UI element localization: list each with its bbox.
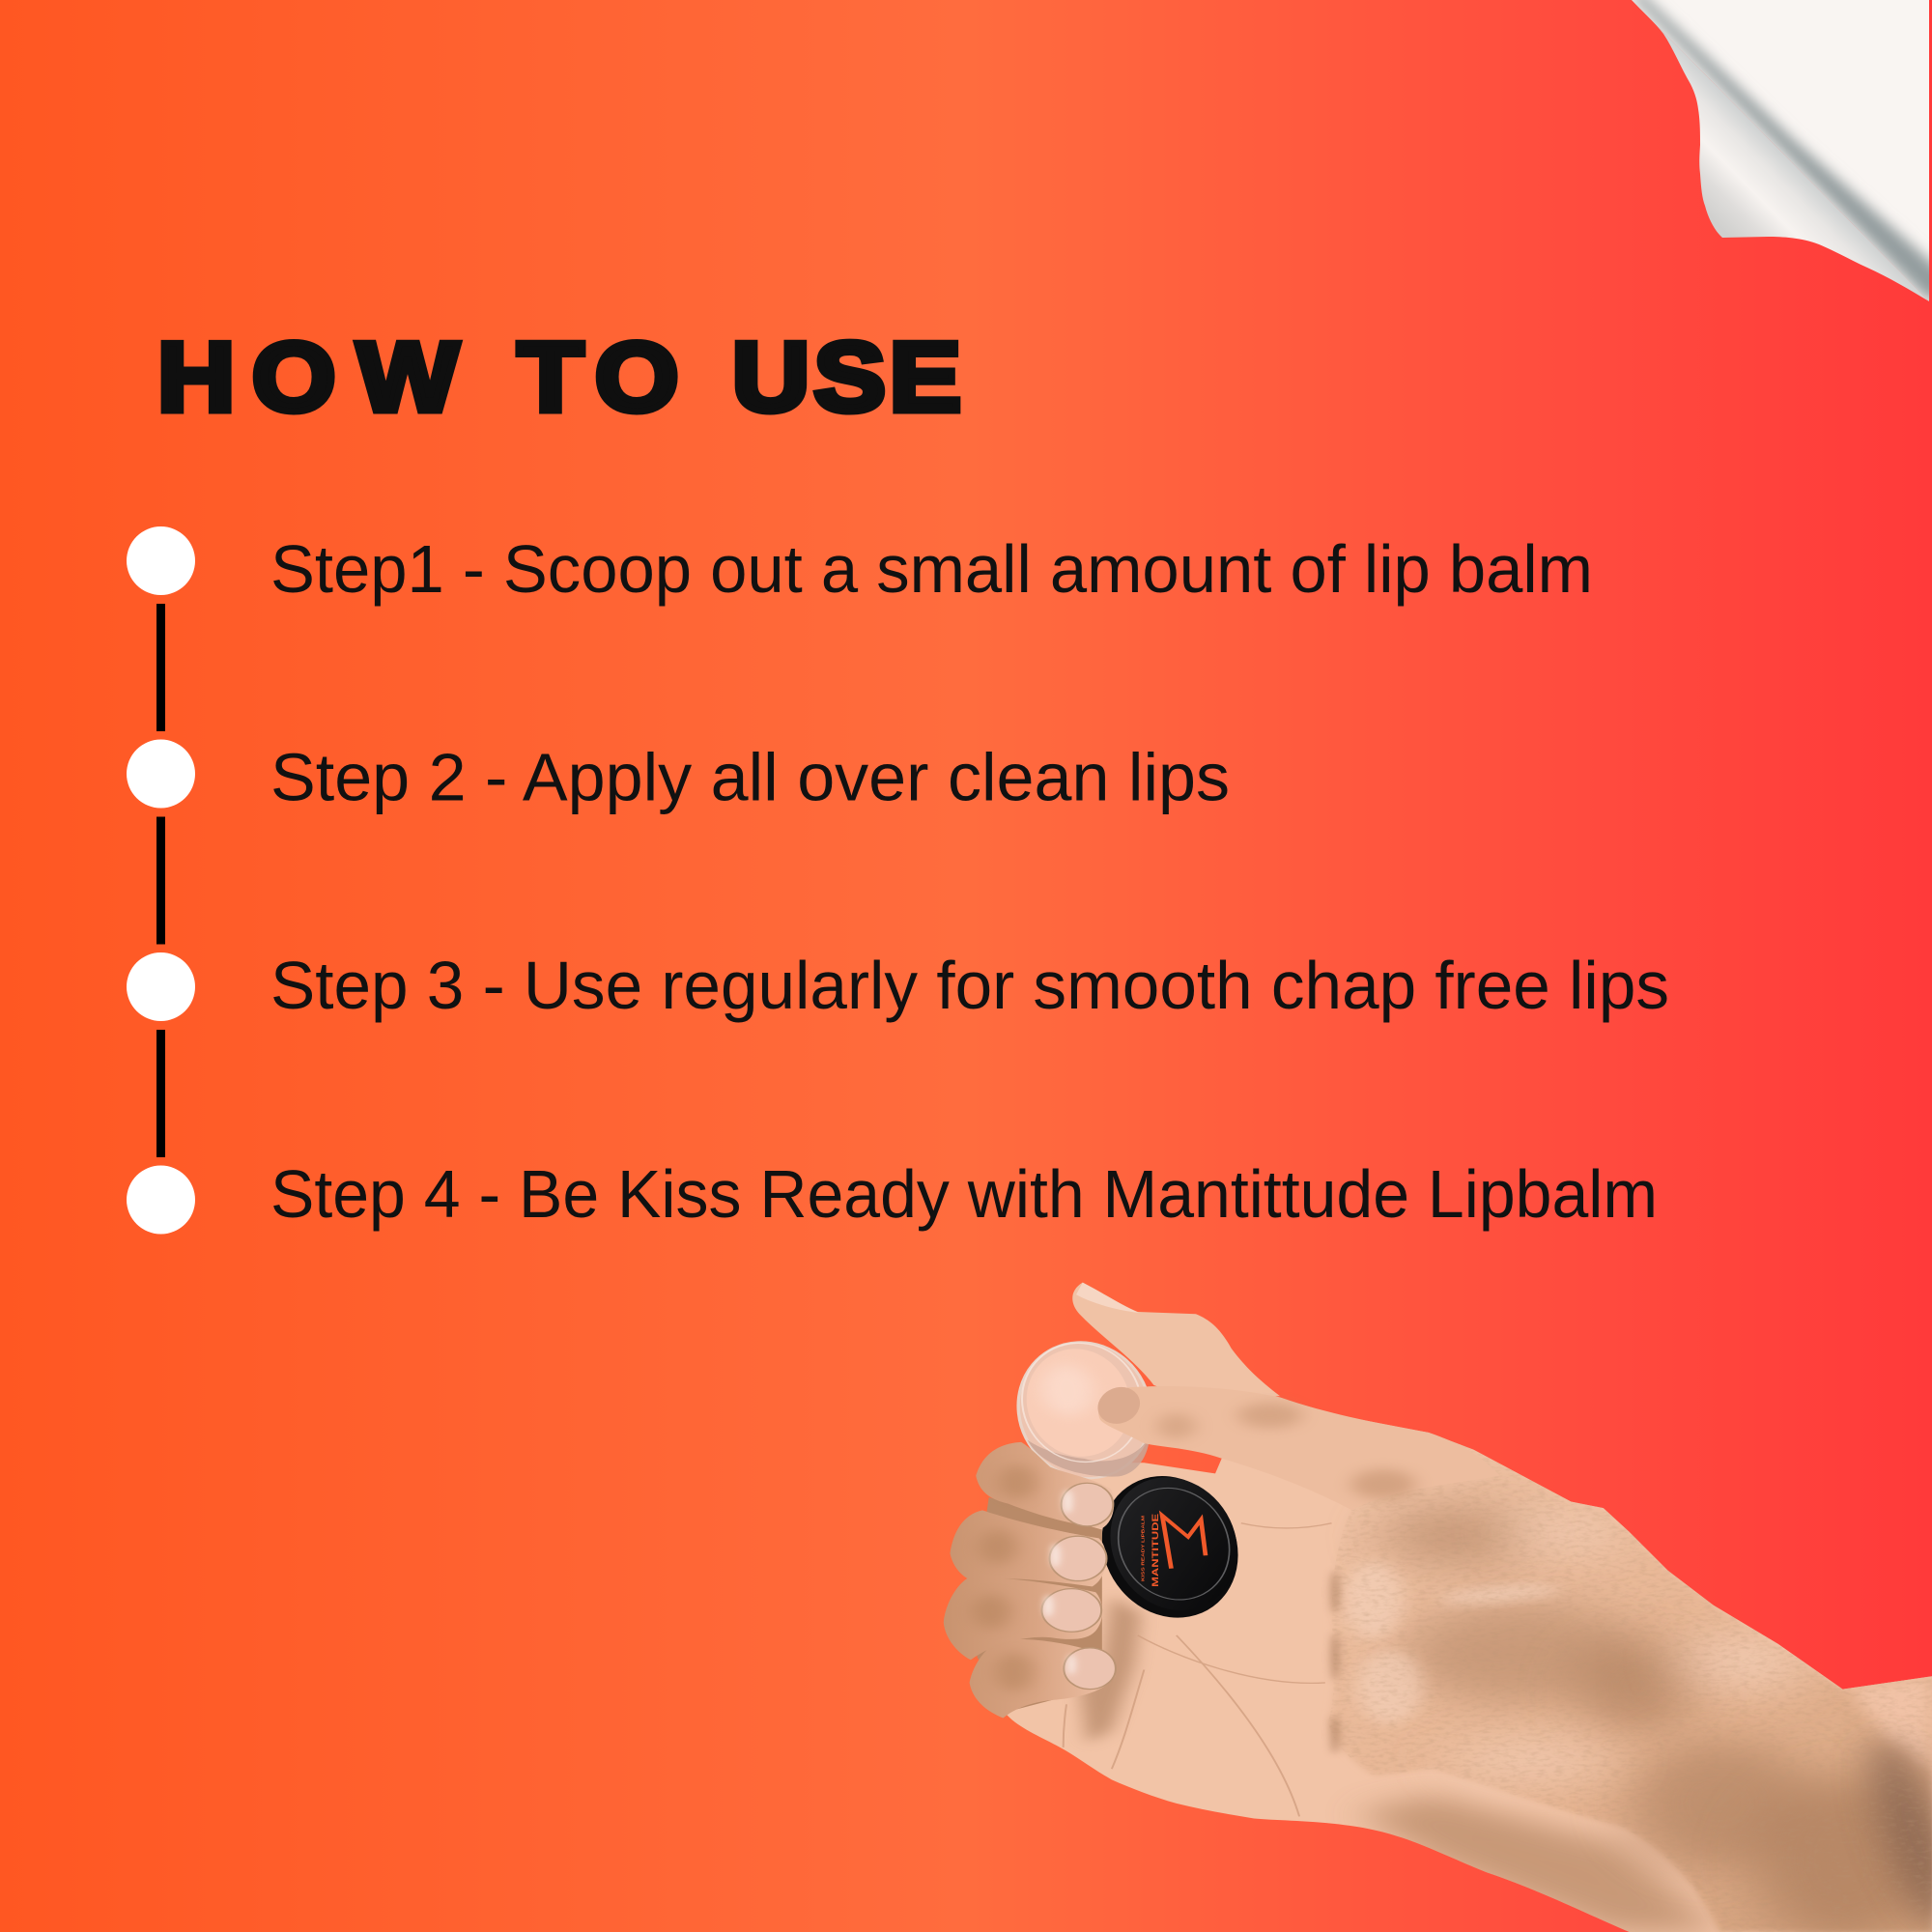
finger 2: [950, 1510, 1106, 1586]
nail 4: [1064, 1648, 1116, 1690]
step 4 text: Step 4 - Be Kiss Ready with Mantittude Lipbalm: [270, 1156, 1658, 1232]
knuckle shading: [973, 1465, 1037, 1691]
nail 1: [1062, 1483, 1113, 1526]
balm surface: [1021, 1347, 1136, 1459]
step 1 text: Step1 - Scoop out a small amount of lip balm: [270, 531, 1593, 607]
logo mark: [1162, 1516, 1206, 1569]
forearm light patch: [1849, 1676, 1932, 1774]
finger nails: [1042, 1483, 1116, 1690]
nail 2: [1050, 1536, 1107, 1581]
title: HOW TO USE: [157, 324, 961, 432]
curled page surface: [1632, 0, 1929, 301]
lid: [1091, 1471, 1250, 1623]
thumb: [1072, 1283, 1280, 1403]
jar rim: [1016, 1341, 1148, 1464]
brand tagline: KISS READY LIPBALM: [1140, 1516, 1145, 1581]
balm highlight: [1039, 1363, 1096, 1417]
jar base glass: [1027, 1434, 1154, 1481]
step 3 text: Step 3 - Use regularly for smooth chap free lips: [270, 948, 1669, 1023]
lid side: [1091, 1471, 1250, 1623]
palm shadow: [1079, 1597, 1141, 1743]
palm, wrist and forearm base: [1005, 1398, 1932, 1932]
step 1 dot: [127, 526, 195, 595]
index finger nail: [1093, 1384, 1145, 1427]
jar body: [1011, 1339, 1157, 1481]
finger crease underlay: [978, 1497, 1102, 1713]
step 2 dot: [127, 740, 195, 808]
fold shadow on page: [1632, 0, 1932, 303]
thumb nail: [1076, 1283, 1139, 1313]
lip balm jar: [1011, 1339, 1157, 1481]
brand name: MANTITUDE: [1151, 1514, 1161, 1587]
connector 3: [156, 1030, 165, 1157]
palm crease lines: [1064, 1523, 1332, 1816]
step 2 text: Step 2 - Apply all over clean lips: [270, 740, 1230, 815]
index finger: [1098, 1386, 1500, 1510]
step texts: [270, 531, 1669, 1232]
lid face: [1099, 1472, 1248, 1615]
page curl corner: [1632, 0, 1932, 303]
finger 1: [976, 1442, 1114, 1528]
lid ring: [1109, 1484, 1238, 1604]
hand back: [1328, 1433, 1932, 1932]
step 4 dot: [127, 1165, 195, 1235]
nail 3: [1042, 1589, 1101, 1632]
connector 1: [156, 604, 165, 731]
inner wrist shading: [1357, 1795, 1719, 1932]
index finger knuckle shading: [1157, 1403, 1416, 1499]
finger 3: [944, 1577, 1102, 1660]
finger 4: [970, 1639, 1116, 1719]
skin shading, hair and highlights: [1306, 1429, 1932, 1932]
timeline: [127, 526, 195, 1235]
hand holding lip balm: [944, 1283, 1932, 1932]
step 3 dot: [127, 952, 195, 1021]
folded flap: [1632, 0, 1929, 301]
connector 2: [156, 817, 165, 945]
nail highlights: [1044, 1490, 1075, 1675]
